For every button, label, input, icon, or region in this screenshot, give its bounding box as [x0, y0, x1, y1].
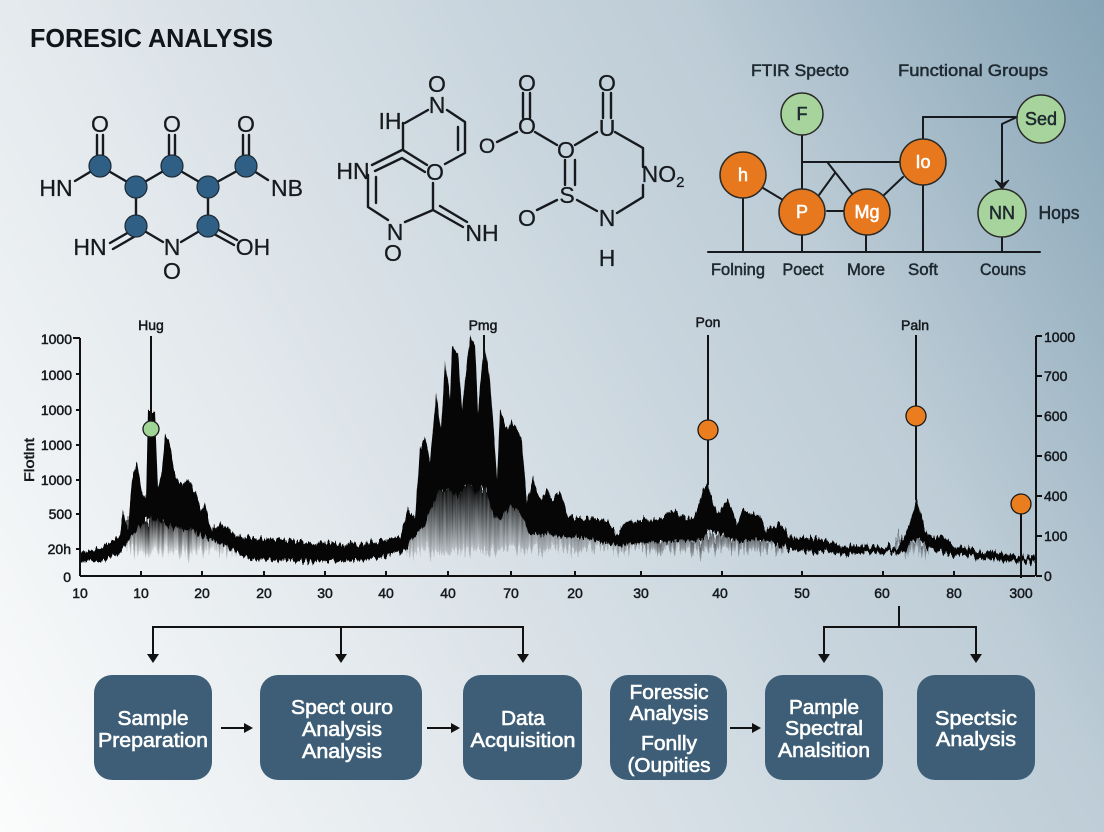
- x axis: 40: [712, 585, 728, 601]
- atom labels: N: [164, 234, 180, 260]
- molecule: left structure: [39, 111, 303, 284]
- peak marker: right: [1011, 494, 1031, 578]
- axis labels: Folning: [711, 260, 765, 279]
- atom labels: OH: [236, 234, 270, 260]
- axis labels: [711, 260, 1026, 279]
- y axis title: Flotlnt: [21, 438, 37, 482]
- atom labels: HN: [336, 158, 370, 184]
- x axis: 10: [133, 585, 149, 601]
- x axis: 80: [946, 585, 962, 601]
- branch arrows: right group: [818, 606, 982, 663]
- x axis: 300: [1009, 585, 1033, 601]
- atom labels: O: [428, 71, 446, 97]
- atom labels: O: [518, 70, 536, 96]
- atom labels: O: [479, 135, 495, 158]
- x axis: 20: [256, 585, 272, 601]
- x axis: 60: [874, 585, 890, 601]
- box: Pample Spectral Analsition: [765, 675, 883, 780]
- peak: Pon: Pon: [696, 314, 720, 330]
- box: Pample Spectral Analsition: Pample: [789, 697, 859, 719]
- atom labels: NH: [465, 220, 499, 246]
- atom labels: O: [518, 113, 536, 139]
- node labels: h: [738, 165, 748, 185]
- axis labels: More: [847, 260, 885, 279]
- atom labels: O: [163, 258, 181, 284]
- box: Data Acquisition: Acquisition: [470, 730, 576, 752]
- left y axis: 20h: [48, 541, 71, 557]
- peak: Hug: Hug: [138, 317, 164, 333]
- right y axis: 100: [1044, 528, 1068, 544]
- atom labels: O: [163, 111, 181, 137]
- molecule: middle ring structure: [336, 71, 499, 266]
- left y axis: 1000: [41, 472, 72, 488]
- green node labels: [796, 104, 1080, 223]
- box: Sample Preparation: Sample: [118, 708, 188, 730]
- right y axis: 600: [1044, 448, 1068, 464]
- spectrum fade streaks: [125, 485, 930, 552]
- node labels: P: [796, 202, 808, 222]
- peak: Pon: [696, 314, 720, 485]
- box: Spect ouro Analysis Analysis: Spect ouro: [291, 697, 393, 719]
- atom labels: [336, 71, 499, 266]
- box: Pample Spectral Analsition: Analsition: [778, 740, 870, 762]
- workflow: [94, 606, 1035, 780]
- atom labels: O: [237, 111, 255, 137]
- molecule: right structure with NO2: [479, 70, 684, 271]
- green node labels: Hops: [1038, 203, 1080, 223]
- atoms: [89, 155, 257, 237]
- box: Spectsic Analysis: [917, 675, 1035, 780]
- atom labels: O: [91, 111, 109, 137]
- x axis: 20: [194, 585, 210, 601]
- peak: Pmg: [469, 317, 497, 360]
- box: Foressic Analysis Fonlly (Oupities: (Oupities: [628, 755, 710, 777]
- node labels: [738, 152, 931, 222]
- atom labels: O: [426, 159, 444, 185]
- peak: Pmg: Pmg: [469, 317, 497, 333]
- axis labels: Couns: [980, 260, 1026, 279]
- atom labels: HN: [73, 234, 107, 260]
- atom labels: U: [599, 115, 615, 141]
- atom labels: [39, 111, 303, 284]
- box: Data Acquisition: Data: [501, 708, 546, 730]
- x axis: 10: [72, 585, 88, 601]
- green node labels: F: [796, 104, 808, 124]
- box: Foressic Analysis Fonlly (Oupities: [610, 675, 727, 780]
- left y axis: [41, 331, 80, 585]
- right y axis: 600: [1044, 408, 1068, 424]
- x axis: 40: [378, 585, 394, 601]
- atom labels: O: [384, 240, 402, 266]
- spectrum trace: [80, 338, 1035, 563]
- bonds: [497, 93, 643, 213]
- box: Spect ouro Analysis Analysis: Analysis: [302, 741, 382, 763]
- left y axis: 1000: [41, 437, 72, 453]
- spectrum chart: [21, 314, 1075, 601]
- arrowhead into NN: [995, 180, 1009, 189]
- orange nodes: [720, 139, 946, 235]
- bonds: [368, 110, 467, 227]
- x axis: 50: [794, 585, 810, 601]
- green nodes: [781, 93, 1065, 237]
- atom labels: [479, 70, 684, 271]
- x axis: 30: [317, 585, 333, 601]
- green node labels: NN: [989, 203, 1015, 223]
- box: Pample Spectral Analsition: Spectral: [785, 718, 863, 740]
- green node labels: Sed: [1025, 109, 1057, 129]
- left y axis: 1000: [41, 402, 72, 418]
- atom labels: NB: [271, 175, 303, 201]
- atom labels: N: [599, 205, 615, 231]
- branch arrows: left group: [147, 627, 529, 663]
- box: Spectsic Analysis: Analysis: [936, 729, 1016, 751]
- atom labels: H: [599, 245, 615, 271]
- box: Foressic Analysis Fonlly (Oupities: Analysis: [630, 703, 708, 725]
- left y axis: 1000: [41, 331, 72, 347]
- x axis: 40: [440, 585, 456, 601]
- atom labels: N: [429, 92, 445, 118]
- right y axis: 1000: [1044, 329, 1075, 345]
- box: Sample Preparation: Preparation: [98, 730, 208, 752]
- right y axis: 700: [1044, 368, 1068, 384]
- right y axis: 400: [1044, 488, 1068, 504]
- box: Spectsic Analysis: Spectsic: [935, 708, 1017, 730]
- box: Foressic Analysis Fonlly (Oupities: Fonlly: [641, 733, 697, 755]
- peak: Paln: Paln: [901, 317, 929, 333]
- box: Spect ouro Analysis Analysis: [260, 675, 422, 780]
- heading: Functional Groups: Functional Groups: [898, 61, 1048, 80]
- x axis: 70: [503, 585, 519, 601]
- atom labels: 2: [676, 174, 684, 191]
- bonds: [75, 135, 268, 249]
- left y axis: 500: [49, 506, 72, 522]
- atom labels: O: [598, 70, 616, 96]
- left y axis: 1000: [41, 367, 72, 383]
- x axis: 30: [633, 585, 649, 601]
- atom labels: IH: [378, 108, 402, 134]
- x axis: [72, 571, 1035, 601]
- atom labels: O: [557, 137, 575, 163]
- atom labels: S: [559, 182, 575, 208]
- axis labels: Poect: [782, 260, 824, 279]
- box: Spect ouro Analysis Analysis: Analysis: [302, 719, 382, 741]
- right y axis: 0: [1044, 568, 1052, 584]
- node labels: Mg: [854, 202, 880, 222]
- atom labels: O: [518, 205, 536, 231]
- atom labels: HN: [39, 175, 73, 201]
- network diagram: FTIR functional groups: [708, 61, 1080, 279]
- left y axis: 0: [63, 569, 71, 585]
- box: Foressic Analysis Fonlly (Oupities: Foressic: [630, 682, 708, 704]
- axis labels: Soft: [908, 260, 938, 279]
- step arrow 3: [730, 723, 761, 733]
- x axis: 20: [567, 585, 583, 601]
- step arrow 2: [427, 723, 460, 733]
- connector lines: [708, 117, 1040, 252]
- atom labels: NO: [642, 161, 676, 187]
- heading: FTIR Specto: FTIR Specto: [751, 61, 849, 80]
- peak: Paln: [901, 317, 929, 500]
- box: Data Acquisition: [463, 675, 582, 780]
- step arrow 1: [221, 723, 253, 733]
- title: FORESIC ANALYSIS: [30, 23, 273, 53]
- atom labels: N: [387, 219, 403, 245]
- peak: Hug: [138, 317, 164, 437]
- right y axis: [1036, 329, 1075, 584]
- node labels: Io: [915, 152, 931, 172]
- box: Sample Preparation: [94, 675, 212, 780]
